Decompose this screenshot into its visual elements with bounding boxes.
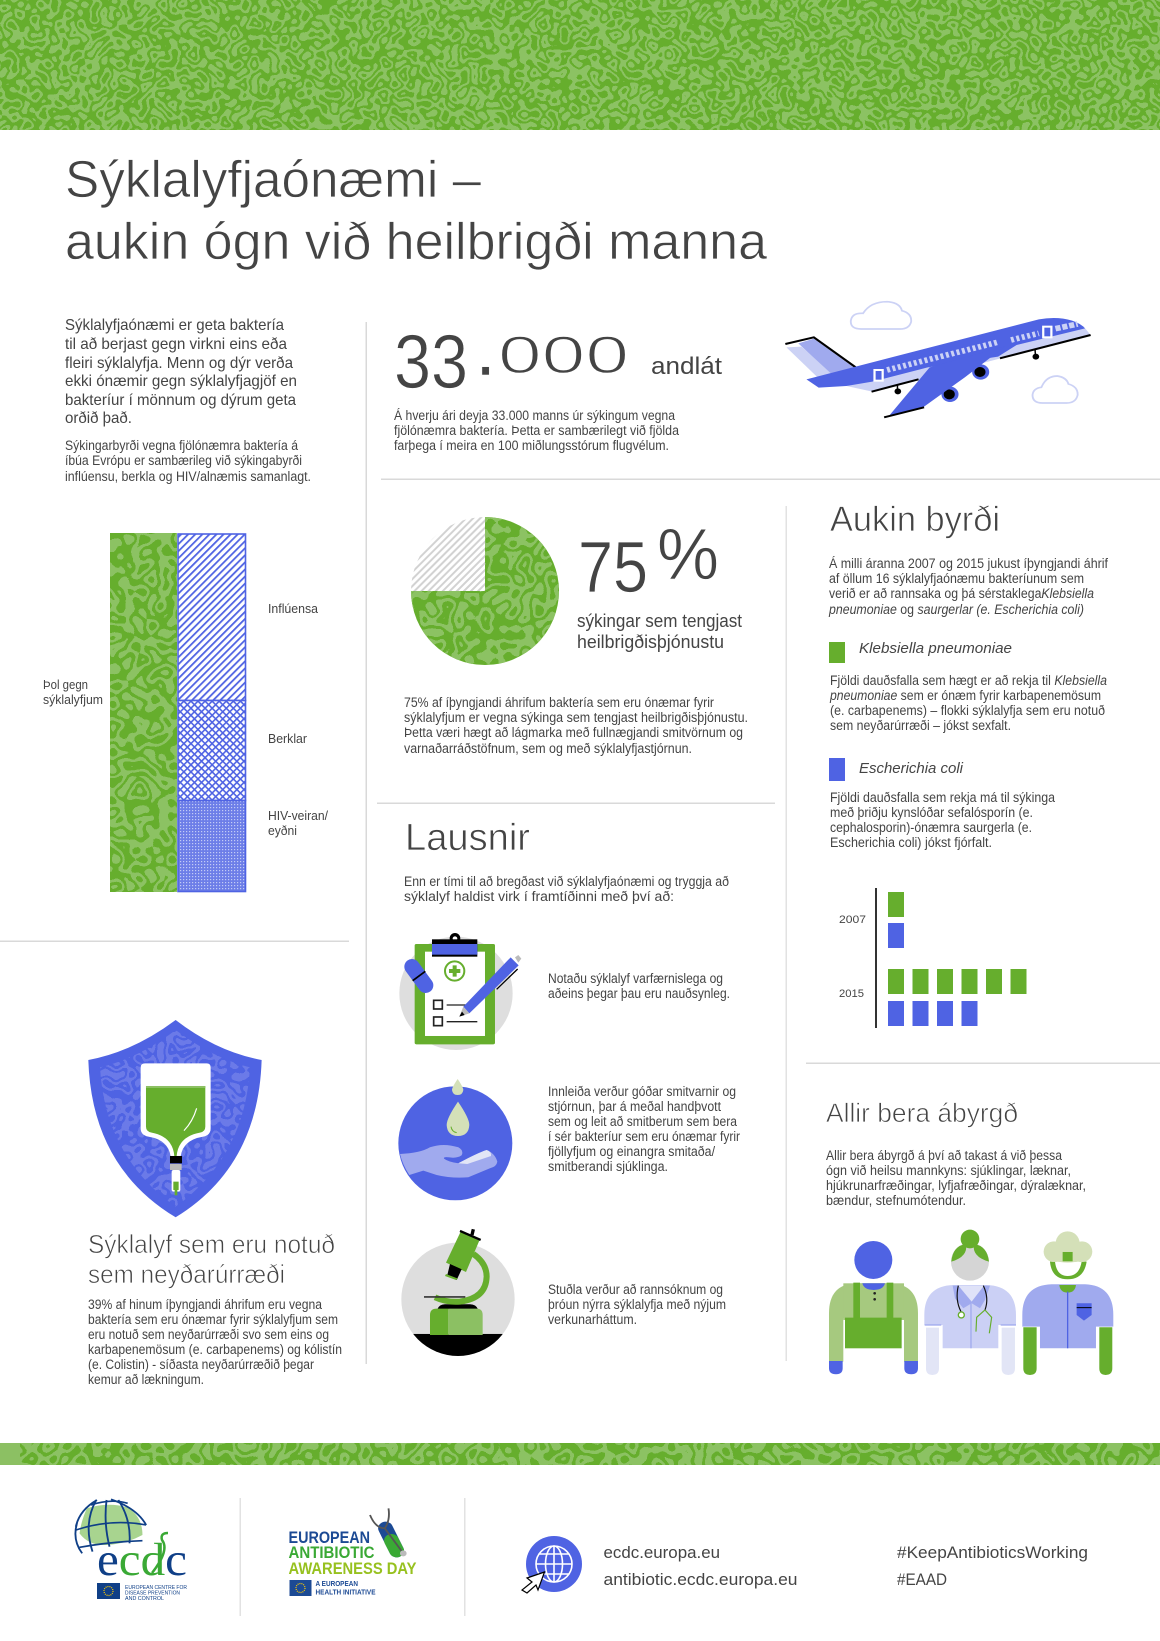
burden text block: inflúensu, berkla og HIV/alnæmis samanlagt. bbox=[65, 469, 311, 484]
text: infection control: fjöllyfjum og einangra smitaða/ bbox=[548, 1144, 715, 1159]
icon: hand washing bbox=[398, 1079, 512, 1200]
E. coli text block: með þriðju kynslóðar sefalósporín (e. bbox=[830, 805, 1033, 820]
heading: Allir bera ábyrgð: Allir bera ábyrgð bbox=[826, 1098, 1018, 1128]
label: healthcare infections: sýkingar sem tengjast bbox=[577, 611, 742, 631]
tagline bbox=[316, 1581, 376, 1596]
label: HIV: eyðni bbox=[268, 824, 297, 838]
text: infection control bbox=[548, 1084, 740, 1174]
last-resort text block: eru notuð sem neyðarúrræði svo sem eins og bbox=[88, 1327, 329, 1342]
shared responsibility text block: Allir bera ábyrgð á því að takast á við þessa bbox=[826, 1148, 1062, 1163]
shared responsibility text block: ógn við heilsu mannkyns: sjúklingar, læknar, bbox=[826, 1163, 1071, 1178]
legend label: Klebsiella: Klebsiella pneumoniae bbox=[859, 640, 1012, 657]
label: healthcare infections: heilbrigðisþjónustu bbox=[577, 632, 724, 652]
big number: 33.000: . bbox=[475, 307, 496, 392]
pie slice: healthcare-associated bbox=[411, 517, 559, 665]
label: tuberculosis: Berklar bbox=[268, 732, 307, 746]
person: surgeon bbox=[1022, 1231, 1113, 1375]
heading: Lausnir: Lausnir bbox=[405, 817, 530, 859]
increased burden text block: verið er að rannsaka og þá sérstaklegaKlebsiella bbox=[829, 586, 1094, 601]
heading: Aukin byrði: Aukin byrði bbox=[830, 500, 1000, 539]
deaths text block bbox=[394, 408, 679, 453]
logo EU flag bbox=[97, 1583, 120, 1599]
bar segment: influenza bbox=[178, 534, 246, 700]
hashtags: #KeepAntibioticsWorking bbox=[897, 1543, 1088, 1562]
heading: last-resort antibiotics bbox=[88, 1229, 335, 1289]
increased burden text block: pneumoniae og saurgerlar (e. Escherichia coli) bbox=[828, 602, 1084, 617]
increased burden text block bbox=[828, 556, 1108, 617]
last-resort text block: (e. Colistin) - síðasta neyðarúrræðið þegar bbox=[88, 1357, 314, 1372]
row: 2007 Klebsiella bbox=[888, 892, 904, 917]
E. coli text block: cephalosporin)-ónæmra saurgerla (e. bbox=[830, 820, 1032, 835]
Klebsiella text block bbox=[829, 673, 1107, 733]
solutions intro text: Enn er tími til að bregðast við sýklalyfjaónæmi og tryggja að bbox=[404, 874, 729, 889]
plane wing bbox=[884, 346, 1006, 417]
icon: shield with IV bag bbox=[88, 1020, 262, 1217]
bar segment: HIV bbox=[178, 800, 246, 892]
row: 2015 E. coli bbox=[888, 1001, 978, 1026]
title: Sýklalyfjaónæmi – bbox=[65, 151, 481, 209]
intro text block: til að berjast gegn virkni eins eða bbox=[65, 336, 287, 353]
footer band bbox=[0, 1443, 1160, 1465]
E. coli text block: Fjöldi dauðsfalla sem rekja má til sýkinga bbox=[830, 790, 1055, 805]
shared responsibility text block bbox=[826, 1148, 1086, 1208]
logo globe bbox=[75, 1499, 146, 1553]
pie slice: other bbox=[411, 517, 485, 591]
icon: clipboard bbox=[399, 933, 521, 1050]
icon: web globe with cursor bbox=[522, 1536, 582, 1593]
healthcare text block: sýklalyfjum er vegna sýkinga sem tengjast heilbrigðisþjónustu. bbox=[404, 710, 748, 725]
E. coli text block: Escherichia coli) jókst fjórfalt. bbox=[830, 835, 992, 850]
heading: last-resort antibiotics: sem neyðarúrræði bbox=[88, 1259, 285, 1289]
Klebsiella text block: sem neyðarúrræði – jókst sexfalt. bbox=[830, 718, 1011, 733]
big number: 75%: % bbox=[657, 515, 719, 595]
last-resort text block bbox=[88, 1297, 342, 1387]
plane tail bbox=[785, 337, 856, 378]
intro text block bbox=[65, 317, 297, 427]
heading: last-resort antibiotics: Sýklalyf sem eru notuð bbox=[88, 1229, 335, 1259]
increased burden text block: af öllum 16 sýklalyfjaónæmu bakteríunum sem bbox=[829, 571, 1084, 586]
last-resort text block: karbapenemösum (e. carbapenems) og kólistín bbox=[88, 1342, 342, 1357]
bar: antibiotic resistance bbox=[110, 533, 177, 892]
website links: ecdc.europa.eu bbox=[604, 1543, 720, 1562]
label: resistance: sýklalyfjum bbox=[43, 693, 103, 707]
big number: 33.000: 000 bbox=[498, 326, 629, 385]
shared responsibility text block: bændur, stefnumótendur. bbox=[826, 1193, 966, 1208]
label: resistance bbox=[43, 678, 103, 707]
Klebsiella text block: Fjöldi dauðsfalla sem hægt er að rekja til Klebsiella bbox=[830, 673, 1107, 688]
healthcare text block bbox=[404, 695, 748, 756]
last-resort text block: kemur að lækningum. bbox=[88, 1372, 204, 1387]
tagline: HEALTH INITIATIVE bbox=[316, 1590, 376, 1596]
person: farmer bbox=[829, 1241, 918, 1374]
icon: airplane with clouds bbox=[785, 302, 1091, 417]
text: research: Stuðla verður að rannsóknum og bbox=[548, 1282, 723, 1297]
deaths text block: farþega í meira en 100 miðlungsstórum flugvélum. bbox=[394, 438, 669, 453]
text: infection control: smitberandi sjúklinga. bbox=[548, 1159, 668, 1174]
website links: antibiotic.ecdc.europa.eu bbox=[604, 1570, 798, 1589]
tagline: A EUROPEAN bbox=[316, 1581, 358, 1588]
hashtags: #EAAD bbox=[897, 1570, 947, 1589]
text: use antibiotics carefully: aðeins þegar þau eru nauðsynleg. bbox=[548, 986, 730, 1001]
deaths text block: Á hverju ári deyja 33.000 manns úr sýkingum vegna bbox=[394, 408, 675, 423]
text: use antibiotics carefully: Notaðu sýklalyf varfærnislega og bbox=[548, 971, 723, 986]
increased burden text block: Á milli áranna 2007 og 2015 jukust íþyngjandi áhrif bbox=[829, 556, 1108, 571]
plane fuselage bbox=[806, 318, 1091, 392]
last-resort text block: 39% af hinum íþyngjandi áhrifum eru vegna bbox=[88, 1297, 322, 1312]
solutions intro text bbox=[404, 874, 729, 904]
intro text block: Sýklalyfjaónæmi er geta baktería bbox=[65, 317, 284, 334]
label: influenza: Inflúensa bbox=[268, 602, 318, 616]
text: research: verkunarháttum. bbox=[548, 1312, 637, 1327]
intro text block: fleiri sýklalyfja. Menn og dýr verða bbox=[65, 355, 293, 372]
label: healthcare infections bbox=[577, 611, 742, 652]
text: infection control: stjórnun, þar á meðal handþvott bbox=[548, 1099, 721, 1114]
wordmark: EUROPEAN bbox=[288, 1529, 370, 1547]
capsule and stethoscope bbox=[370, 1508, 407, 1556]
logo caption: AND CONTROL bbox=[125, 1596, 164, 1602]
year label 2015: 2015 bbox=[839, 988, 864, 1000]
healthcare text block: Þetta væri hægt að lágmarka með fullnægjandi smitvörnum og bbox=[404, 725, 743, 740]
Klebsiella text block: pneumoniae sem er ónæm fyrir karbapenemösum bbox=[829, 688, 1101, 703]
logo wordmark: ecdc bbox=[97, 1534, 187, 1586]
big number: 75%: 75 bbox=[578, 528, 648, 608]
wordmark: AWARENESS DAY bbox=[288, 1560, 416, 1578]
intro text block: orðið það. bbox=[65, 410, 132, 427]
icon: microscope bbox=[400, 1229, 517, 1361]
EU flag bbox=[290, 1580, 312, 1596]
year label 2007: 2007 bbox=[839, 914, 866, 926]
row: 2007 E. coli bbox=[888, 923, 904, 948]
burden text block: Sýkingarbyrði vegna fjölónæmra baktería á bbox=[65, 438, 298, 453]
icon: cloud top bbox=[851, 302, 911, 329]
deaths text block: fjölónæmra baktería. Þetta er sambærilegt við fjölda bbox=[394, 423, 679, 438]
burden text block bbox=[65, 438, 311, 484]
label: HIV: HIV-veiran/ bbox=[268, 809, 328, 823]
wordmark: ANTIBIOTIC bbox=[288, 1544, 375, 1562]
website links bbox=[604, 1543, 798, 1589]
healthcare text block: 75% af íþyngjandi áhrifum baktería sem eru ónæmar fyrir bbox=[404, 695, 714, 710]
text: research: þróun nýrra sýklalyfja með nýjum bbox=[548, 1297, 726, 1312]
title bbox=[65, 151, 767, 271]
wordmark bbox=[288, 1529, 416, 1578]
header banner bbox=[0, 0, 1160, 130]
Klebsiella text block: (e. carbapenems) – flokki sýklalyfja sem eru notuð bbox=[830, 703, 1105, 718]
person: doctor bbox=[924, 1230, 1016, 1375]
text: infection control: Innleiða verður góðar smitvarnir og bbox=[548, 1084, 736, 1099]
logo: European Antibiotic Awareness Day bbox=[288, 1508, 416, 1596]
last-resort text block: baktería sem eru ónæmar fyrir sýklalyfjum sem bbox=[88, 1312, 338, 1327]
label: deaths: andlát bbox=[651, 353, 722, 380]
label: HIV bbox=[268, 809, 328, 838]
intro text block: bakteríur í mönnum og dýrum geta bbox=[65, 392, 296, 409]
hashtags bbox=[897, 1543, 1088, 1589]
solutions intro text: sýklalyf haldist virk í framtíðinni með því að: bbox=[404, 889, 674, 904]
chart axis bbox=[875, 888, 877, 1028]
logo caption: DISEASE PREVENTION bbox=[125, 1590, 180, 1596]
icon: cloud bottom bbox=[1033, 376, 1078, 403]
E. coli text block bbox=[830, 790, 1055, 850]
row: 2015 Klebsiella bbox=[888, 969, 1026, 994]
big number: 33.000: 33 bbox=[394, 320, 468, 405]
legend swatch: Klebsiella bbox=[829, 642, 845, 663]
healthcare text block: varnaðarráðstöfnum, sem og með sýklalyfjastjórnun. bbox=[404, 741, 692, 756]
legend swatch: E. coli bbox=[829, 758, 845, 781]
intro text block: ekki ónæmir gegn sýklalyfjagjöf en bbox=[65, 373, 297, 390]
logo caption bbox=[125, 1585, 187, 1602]
plane engines and gear bbox=[894, 350, 1039, 402]
bar segment: tuberculosis bbox=[178, 700, 246, 800]
title: aukin ógn við heilbrigði manna bbox=[65, 213, 767, 271]
text: research bbox=[548, 1282, 726, 1327]
logo sprout bbox=[152, 1533, 168, 1573]
logo caption: EUROPEAN CENTRE FOR bbox=[125, 1585, 187, 1591]
text: use antibiotics carefully bbox=[548, 971, 730, 1001]
label: resistance: Þol gegn bbox=[43, 678, 88, 692]
text: infection control: sem og leit að smitberum sem bera bbox=[548, 1114, 737, 1129]
text: infection control: í sér bakteríur sem eru ónæmar fyrir bbox=[548, 1129, 740, 1144]
logo: ECDC bbox=[75, 1499, 187, 1602]
burden text block: íbúa Evrópu er sambærileg við sýkingabyrði bbox=[65, 453, 302, 468]
pictogram chart: 2007 vs 2015 bbox=[839, 888, 1026, 1028]
stacked bar chart: burden comparison bbox=[43, 533, 328, 892]
shared responsibility text block: hjúkrunarfræðingar, lyfjafræðingar, dýralæknar, bbox=[826, 1178, 1086, 1193]
people illustrations bbox=[829, 1230, 1113, 1375]
legend label: E. coli: Escherichia coli bbox=[859, 760, 964, 777]
pie chart: 75% bbox=[411, 517, 559, 665]
